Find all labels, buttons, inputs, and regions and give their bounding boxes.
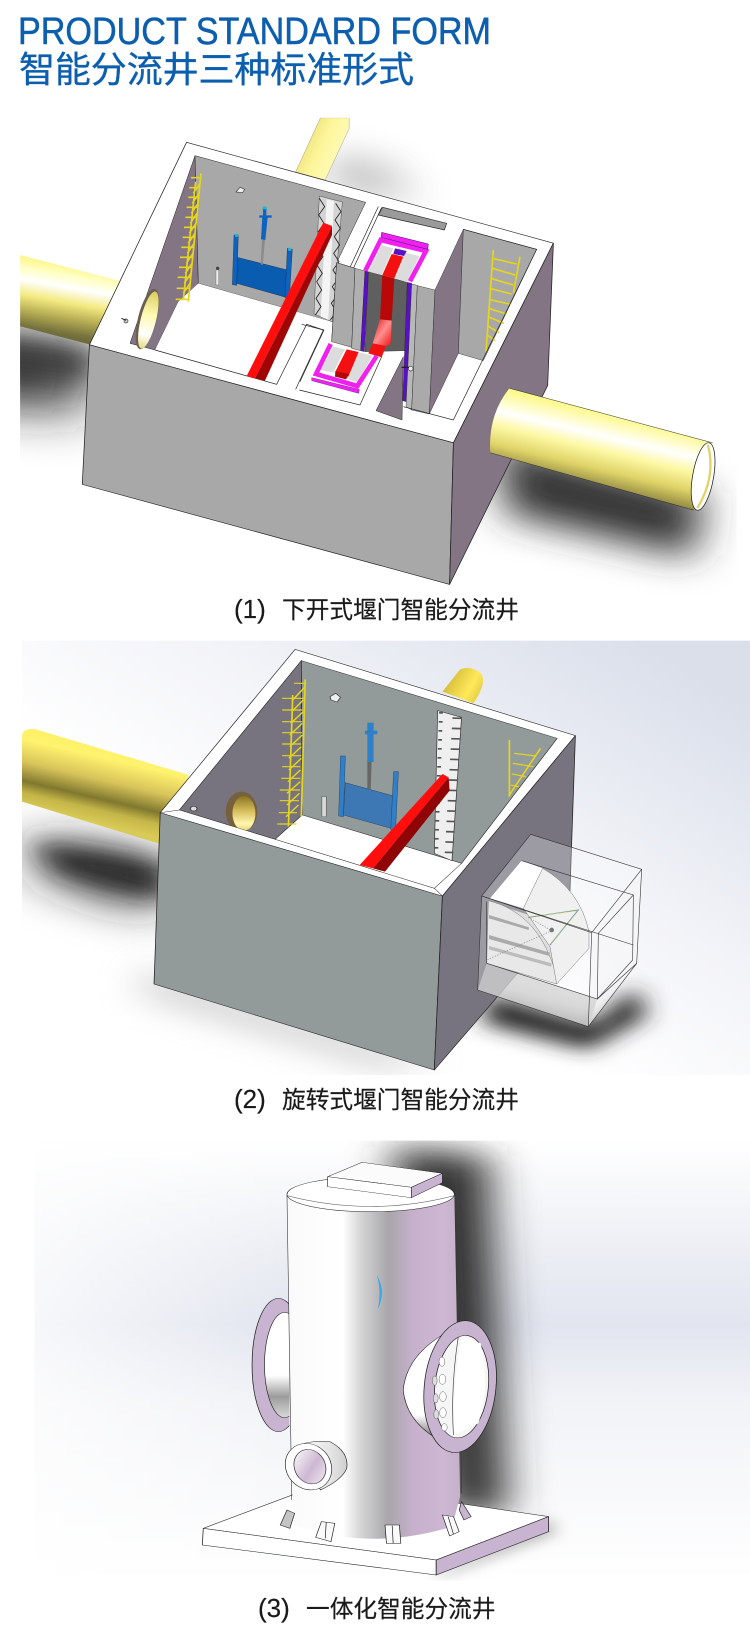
instrument: sensors xyxy=(190,693,341,817)
glass edges xyxy=(478,834,642,1027)
caption 3: (3) xyxy=(258,1593,290,1623)
hole: pipe opening xyxy=(226,792,257,832)
well: box body xyxy=(154,649,575,1070)
pipe: rear inlet xyxy=(296,118,349,180)
panel: integrated well xyxy=(34,1141,750,1623)
gate: blue sluice gate xyxy=(232,206,292,299)
instrument: corner sensor xyxy=(121,318,128,323)
red beam xyxy=(247,223,332,381)
small pipe outlet xyxy=(281,1441,347,1492)
caption 2: (2) xyxy=(234,1084,266,1114)
shadow: left pipe broad ground shadow xyxy=(29,837,163,913)
glass housing with rotary weir xyxy=(478,834,642,1027)
caption 1: 下开式堰门智能分流井 xyxy=(282,597,519,624)
base plate xyxy=(202,1493,549,1575)
wall: left chamber side wall xyxy=(130,156,198,350)
glass body fill xyxy=(478,834,642,1027)
right flange with perforated weir xyxy=(403,1319,502,1454)
shadow: left pipe core shadow xyxy=(0,328,91,380)
panel: rotating weir well xyxy=(22,641,750,1114)
chamber: left chamber interior xyxy=(121,156,366,389)
ladder: right chamber ladder xyxy=(486,250,520,352)
wall: back interior wall xyxy=(301,661,557,863)
foot brackets xyxy=(280,1502,471,1543)
shadow: left pipe core shadow xyxy=(33,842,163,900)
blue mark xyxy=(377,1275,382,1309)
weir top: upper magenta frame xyxy=(365,232,428,282)
hole: pipe opening in wall xyxy=(131,287,164,351)
lid hatch xyxy=(328,1162,442,1198)
ladder: left wall ladder xyxy=(176,173,201,302)
guide rails xyxy=(434,711,462,861)
caption 3: 一体化智能分流井 xyxy=(306,1596,496,1623)
instrument: level sensor xyxy=(216,187,245,285)
rim: front top rim xyxy=(160,810,442,896)
panel: downward-opening weir well xyxy=(0,118,719,624)
ladder: right wall ladder xyxy=(509,740,540,797)
title: Chinese heading: 智能分流井三种标准形式 xyxy=(19,49,414,90)
shadow: right pipe ground shadow xyxy=(497,439,703,558)
central wall faces xyxy=(332,229,537,414)
shadow: cast shadow of cylinder xyxy=(392,1147,507,1513)
shadow: left pipe broad ground shadow xyxy=(0,324,91,411)
floor: chamber floor xyxy=(155,283,332,385)
caption 1: (1) xyxy=(234,594,266,624)
pipe: left inlet xyxy=(20,255,120,345)
gate: blue sluice gate xyxy=(339,723,398,830)
ladder: left wall ladder xyxy=(277,679,306,827)
shadow: base soft shadow xyxy=(436,1517,557,1578)
red overflow channel xyxy=(368,275,394,357)
rim lines xyxy=(403,229,537,420)
chamber: central overflow structure and outlet chamber xyxy=(299,207,537,420)
caption 2: 旋转式堰门智能分流井 xyxy=(282,1087,519,1114)
red beam xyxy=(360,774,450,872)
shadow: housing ground shadow xyxy=(483,987,646,1050)
title: English heading: PRODUCT STANDARD FORM xyxy=(18,11,491,53)
instrument: inner sensor xyxy=(402,366,413,371)
weir bottom: lower magenta frame xyxy=(312,344,377,393)
pipe: left inlet xyxy=(22,729,189,844)
pipe: right outlet xyxy=(490,388,719,511)
shadow: rear pipe soft shadow xyxy=(330,158,421,198)
left flange xyxy=(252,1298,290,1432)
recess slot xyxy=(299,207,447,405)
backdrop gradient xyxy=(34,1141,750,1581)
wall: chamber back wall xyxy=(195,156,366,322)
wedge wall xyxy=(376,357,403,420)
well: concrete box body xyxy=(82,142,553,584)
cylinder lid xyxy=(287,1177,454,1212)
floor: white floor xyxy=(275,815,462,888)
wall: left interior wall xyxy=(179,661,302,839)
cylinder body xyxy=(287,1195,460,1539)
weir plate xyxy=(487,861,589,984)
pipe: rear inlet xyxy=(442,668,483,703)
backdrop gradient xyxy=(22,641,750,1075)
guide rails: gate guide rails xyxy=(314,196,342,322)
shadow: box soft shadow xyxy=(143,967,430,1070)
